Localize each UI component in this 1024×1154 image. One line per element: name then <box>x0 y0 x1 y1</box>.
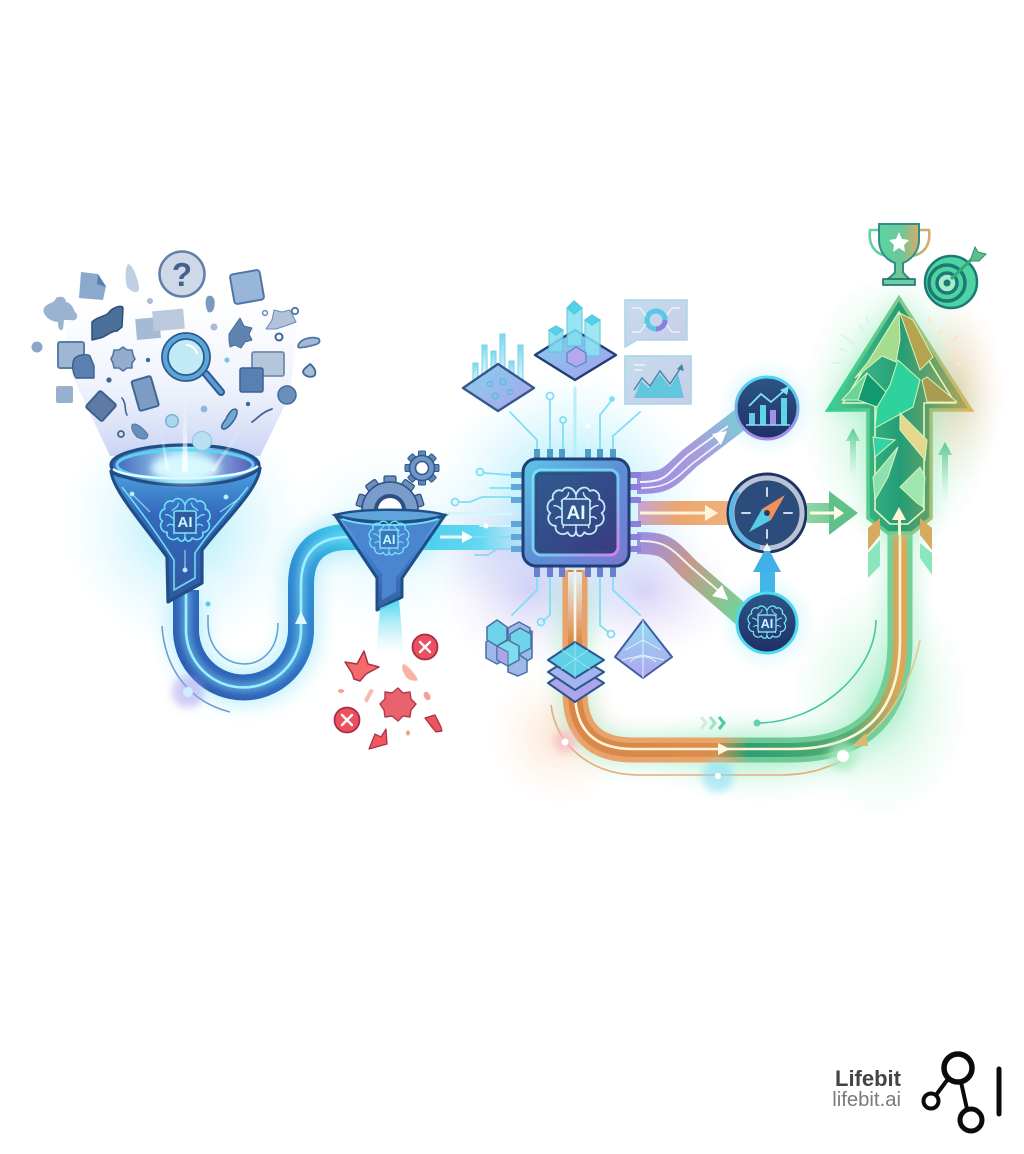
circuit lines on funnel <box>130 492 240 572</box>
circuit traces around chip <box>450 388 640 638</box>
icon: donut panel <box>625 300 687 347</box>
shards <box>369 729 387 749</box>
logo text: Lifebit <box>835 1066 902 1091</box>
thin orbit lines <box>208 615 278 664</box>
logo mark <box>924 1054 999 1131</box>
icon: pyramid <box>615 620 672 678</box>
funnel 2 <box>335 510 445 610</box>
pipe: chip to goal <box>551 510 920 792</box>
light beams <box>160 395 243 472</box>
chip pins <box>511 449 641 577</box>
icon: cube cluster <box>486 620 532 676</box>
circle: AI brain: AI <box>761 617 773 631</box>
arrow facets <box>842 312 957 507</box>
icon: stacked layers <box>548 642 604 702</box>
question mark badge: ? <box>172 256 192 293</box>
circle: AI brain <box>737 593 797 653</box>
side chevrons <box>868 518 932 578</box>
upper output <box>637 412 750 483</box>
funnel brain: AI <box>178 514 192 531</box>
bowl rim <box>111 445 259 485</box>
small gear <box>405 451 439 485</box>
gears <box>356 451 439 544</box>
question mark badge <box>160 252 204 296</box>
large gear <box>356 476 424 544</box>
circle: growth chart <box>736 377 798 439</box>
funnel brain <box>160 499 210 541</box>
trophy <box>870 224 929 285</box>
AI chip <box>523 459 629 566</box>
output pipes <box>637 412 750 622</box>
chip brain: AI <box>566 503 586 524</box>
outer curve <box>551 705 845 775</box>
logo text <box>832 1066 902 1111</box>
document fragments and blobs <box>32 264 320 439</box>
ambient glows <box>60 270 1005 820</box>
target <box>925 247 986 308</box>
pipe: funnel 1 to funnel 2 <box>162 537 430 712</box>
icon: cubes platform <box>535 301 616 380</box>
rejected stream <box>376 600 404 655</box>
goal arrow <box>826 296 973 535</box>
side up arrows <box>846 428 952 502</box>
inner up arrow <box>892 507 906 535</box>
panel: scattered data chaos <box>32 252 320 456</box>
red x badge <box>334 708 360 732</box>
pipe arrow up <box>295 611 307 624</box>
chevrons <box>701 717 724 729</box>
red x badge <box>412 634 438 660</box>
pipe: funnel 2 to chip <box>430 512 525 550</box>
arrow: compass to goal <box>807 491 858 535</box>
funnel 1 <box>111 395 260 602</box>
funnel 2 brain: AI <box>382 532 396 547</box>
red star <box>345 651 379 681</box>
sparkle rays <box>833 316 966 364</box>
magnifying glass <box>162 333 221 392</box>
thin inside curve <box>757 620 876 723</box>
icon: data bars platform <box>463 334 534 411</box>
rejected items <box>334 634 442 749</box>
logo text: lifebit.ai <box>832 1089 901 1111</box>
middle output <box>638 501 733 525</box>
red splat <box>380 688 416 721</box>
arrow: AI circle to compass <box>753 543 781 596</box>
icon: line chart panel <box>625 356 691 404</box>
compass <box>728 474 806 552</box>
lower output <box>637 543 750 622</box>
light cone above funnel <box>60 300 300 456</box>
